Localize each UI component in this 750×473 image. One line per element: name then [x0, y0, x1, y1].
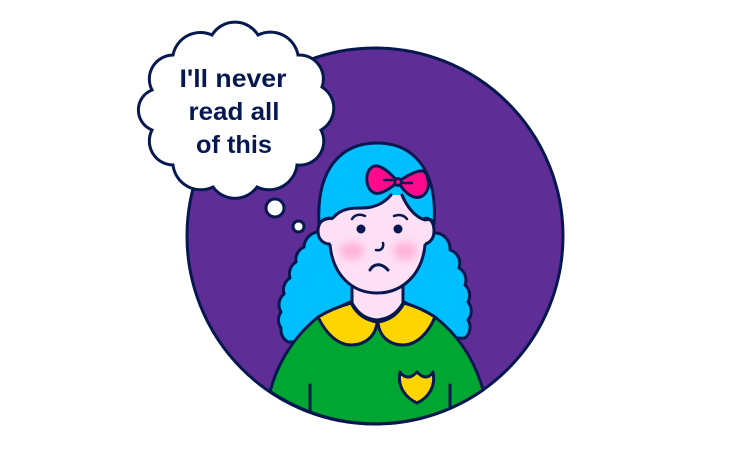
girl character — [266, 143, 488, 430]
sleeve line left — [308, 385, 312, 411]
eyes — [356, 224, 402, 234]
purple circle background — [187, 48, 563, 424]
neck — [352, 280, 403, 320]
ears — [318, 218, 434, 244]
nose — [376, 243, 383, 250]
long curly hair — [278, 232, 471, 342]
sleeve line right — [448, 385, 452, 406]
circle outline over sweater — [271, 390, 483, 424]
thought bubble text: read all — [188, 98, 280, 126]
green sweater — [266, 302, 488, 430]
face outline — [322, 195, 432, 293]
large thought dot — [266, 199, 284, 217]
collar left — [318, 303, 377, 345]
thought bubble cloud — [138, 22, 334, 198]
mouth — [370, 265, 388, 270]
face fill — [330, 195, 425, 293]
small thought dot — [293, 221, 304, 232]
thought bubble text: of this — [196, 131, 272, 159]
eyebrows — [352, 215, 407, 219]
thought bubble text: I'll never — [180, 65, 287, 93]
hair top — [319, 143, 434, 224]
shield badge — [399, 372, 434, 403]
cheeks — [340, 242, 417, 260]
thought bubble text — [180, 65, 287, 159]
bow — [367, 166, 428, 198]
collar right — [378, 303, 435, 345]
